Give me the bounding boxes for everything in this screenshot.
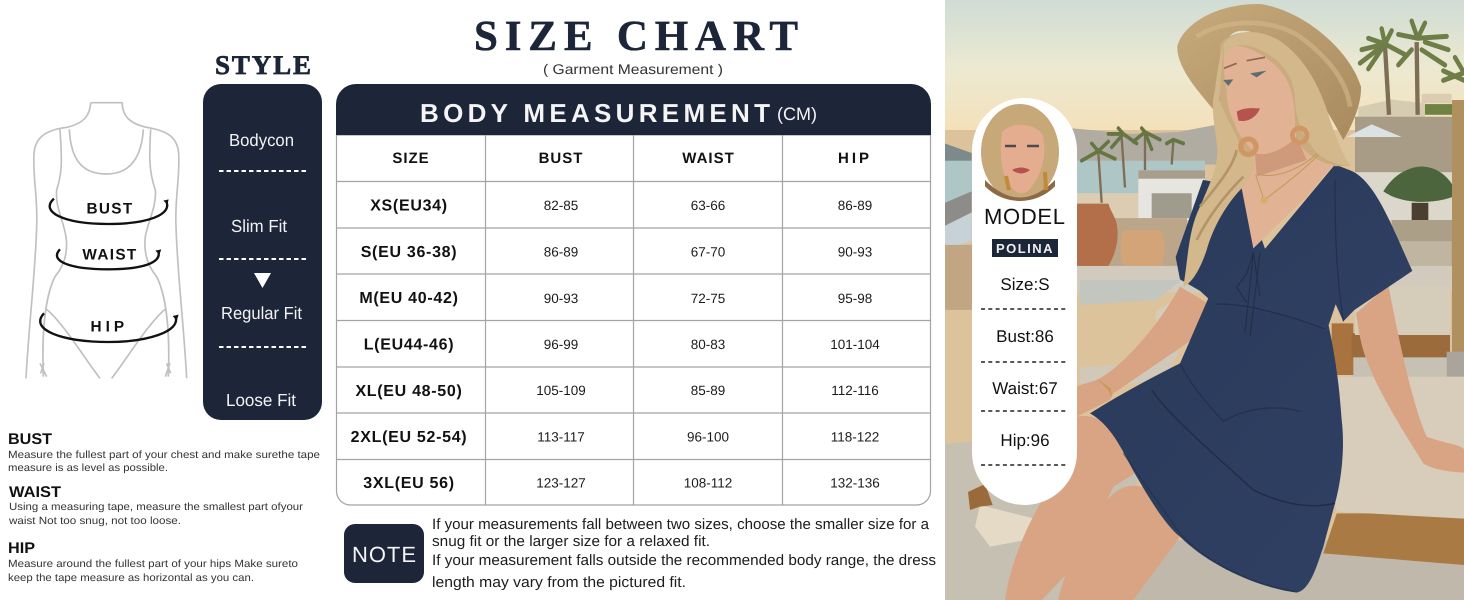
table rows: 82-85 [544,198,578,213]
body measurement diagram: BUST [86,199,134,217]
scene: palms [1082,21,1464,203]
scene: dress bodice and sleeves [1176,165,1412,337]
text block: hip instructions: keep the tape measure as horizontal as you can. [8,572,254,584]
table rows: 85-89 [691,383,725,398]
model measurements [981,275,1068,465]
table column headings: HIP [838,150,872,167]
scene: model head and hat [1177,4,1361,287]
text block: hip instructions: Measure around the fullest part of your hips Make sureto [8,558,298,570]
table rows: 132-136 [830,476,880,490]
note badge: NOTE [352,542,416,567]
note text [432,516,936,591]
table rows: L(EU44-46) [364,336,454,354]
model name tag: POLINA [996,241,1054,256]
panel: style fit scale [203,84,322,420]
panel: style fit scale: Bodycon [229,130,294,150]
note text: snug fit or the larger size for a relaxed fit. [432,533,710,550]
dress lower tiers [1090,287,1343,593]
text block: hip instructions [8,540,298,584]
model name: MODEL [984,204,1065,229]
model measurements: Waist:67 [992,379,1058,398]
table column headings [392,150,872,167]
panel: model card [972,98,1077,505]
model legs and arms [1005,285,1464,600]
table rows: 112-116 [831,383,879,398]
table rows: 2XL(EU 52-54) [351,429,467,446]
table rows: 96-100 [687,430,729,444]
table rows: 80-83 [691,337,725,352]
table column headings: BUST [539,150,583,167]
panel: style fit scale: Loose Fit [226,390,296,410]
scene: stone wall and villa [1138,94,1462,270]
model measurements: Hip:96 [1000,431,1050,450]
text block: waist instructions: Using a measuring tape, measure the smallest part ofyour [9,501,304,513]
panel: body measurement table [336,84,931,505]
table rows: 113-117 [537,430,585,444]
table rows: XL(EU 48-50) [355,383,463,400]
table rows: M(EU 40-42) [359,290,459,307]
panel: style fit scale: Regular Fit [221,303,302,323]
model measurements: Size:S [1000,275,1050,294]
table header band: (CM) [777,104,817,124]
table rows: 86-89 [838,198,872,213]
scene: terracotta pots and ledge [945,204,1457,310]
table rows: 95-98 [838,291,872,306]
model portrait [981,104,1059,205]
subtitle: ( Garment Measurement ) [543,61,723,77]
note text: length may vary from the pictured fit. [432,574,686,591]
table rows: 90-93 [838,244,872,260]
table column headings: WAIST [682,150,735,167]
table header band: BODY MEASUREMENT [420,98,770,128]
model measurements: Bust:86 [996,327,1054,346]
table header band [336,84,931,135]
table rows [351,198,880,492]
panel: style fit scale: Slim Fit [231,216,287,236]
text block: bust instructions: BUST [8,431,53,448]
note badge [344,524,424,583]
table rows: 123-127 [536,476,586,490]
table rows: 101-104 [830,337,880,352]
text block: waist instructions: waist Not too snug, not too loose. [8,515,181,527]
style heading: STYLE [215,50,311,80]
text block: bust instructions: Measure the fullest part of your chest and make surethe tape [8,449,320,461]
note text: If your measurement falls outside the recommended body range, the dress [432,552,936,569]
body measurement diagram [26,103,187,378]
table rows: 108-112 [684,476,732,490]
text block: waist instructions: WAIST [9,484,62,501]
body measurement diagram: WAIST [82,245,138,263]
table rows: XS(EU34) [370,198,448,214]
table rows: 67-70 [691,244,725,260]
title: SIZE CHART [474,13,798,60]
scene: ground, loungers and post [945,100,1464,600]
table rows: 105-109 [536,383,586,398]
table rows: 86-89 [544,244,578,260]
table rows: 63-66 [691,198,725,213]
note text: If your measurements fall between two sizes, choose the smaller size for a [432,516,930,533]
table column headings: SIZE [392,150,430,167]
table rows: 3XL(EU 56) [363,475,455,492]
photo: model on terrace [945,0,1464,600]
table rows: 96-99 [544,337,578,352]
table rows: 90-93 [544,291,578,306]
text block: hip instructions: HIP [8,540,35,557]
text block: bust instructions [8,431,320,474]
table rows: 118-122 [831,430,879,444]
scene: mountains and sea [945,99,1425,249]
table rows: S(EU 36-38) [361,244,457,261]
text block: bust instructions: measure is as level as possible. [8,462,168,474]
text block: waist instructions [8,484,304,527]
body measurement diagram: HIP [91,317,128,335]
table rows: 72-75 [691,291,725,306]
